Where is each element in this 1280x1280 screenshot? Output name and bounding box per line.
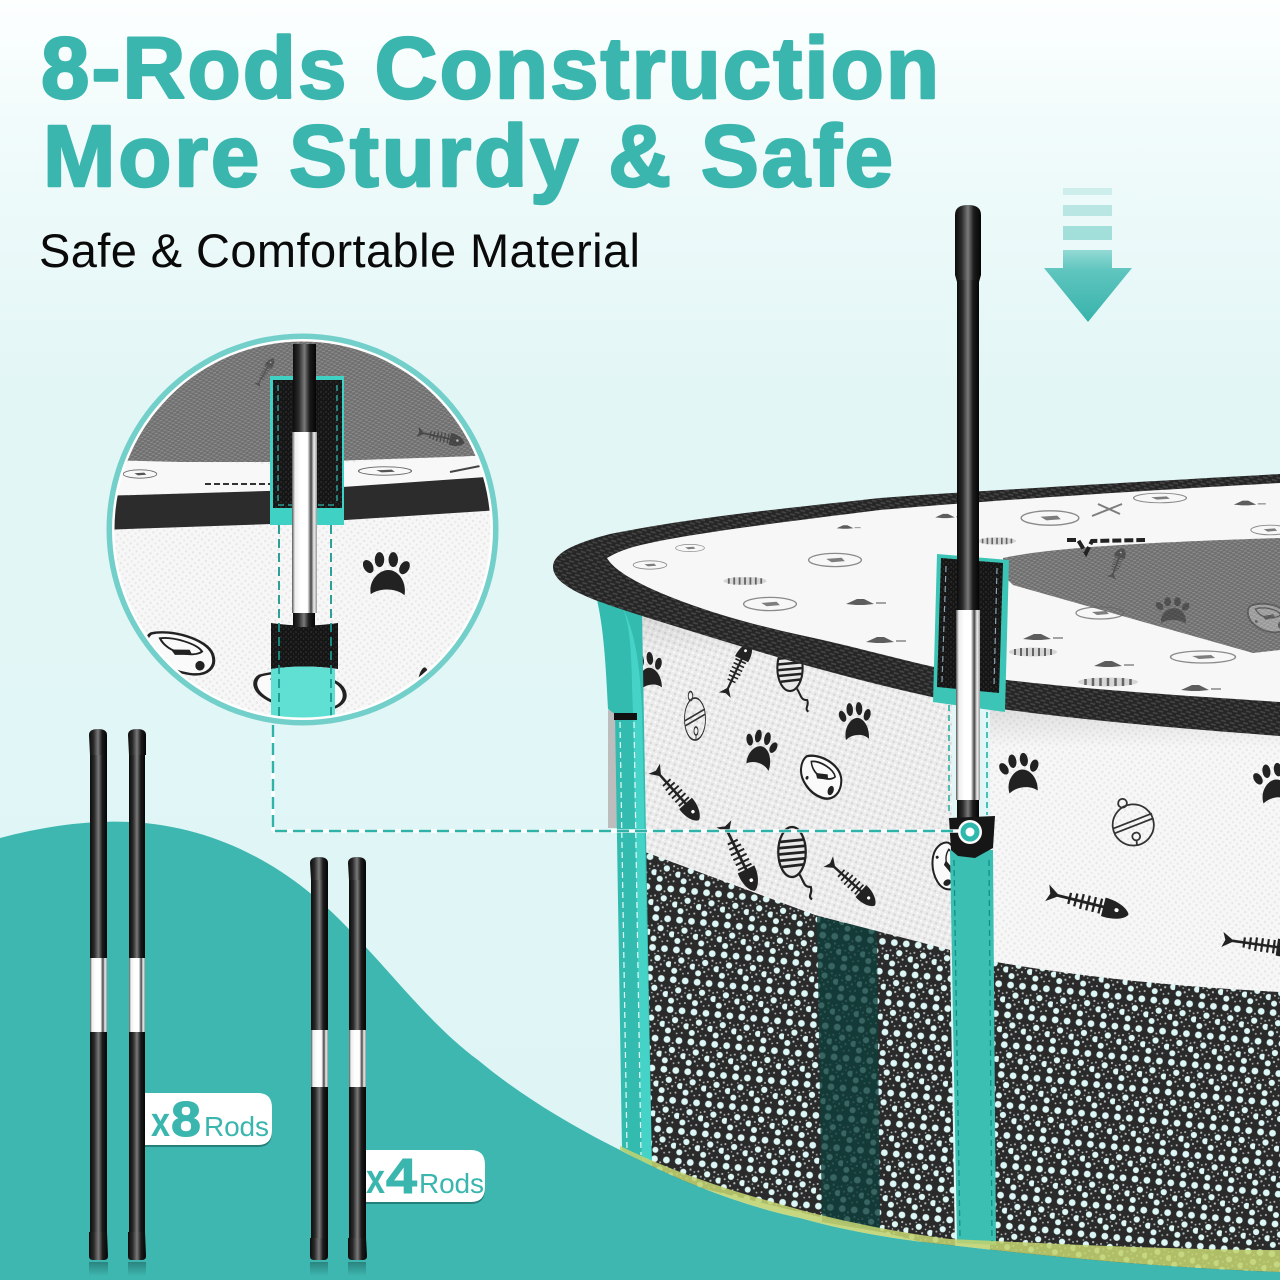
label: x4 rods: 4 — [386, 1150, 417, 1204]
icon: bell — [684, 692, 706, 740]
panel: left wall mesh — [645, 852, 955, 1250]
subtitle: Safe & Comfortable Material — [39, 224, 640, 277]
title: More Sturdy & Safe — [43, 108, 893, 205]
white band — [120, 456, 483, 494]
panel: center strap — [950, 850, 996, 1245]
label: x4 rods: x — [366, 1155, 386, 1202]
panel: left side strap — [597, 600, 652, 1170]
label: x8 rods: Rods — [204, 1111, 269, 1142]
icon: paw prints — [642, 652, 871, 771]
label: x8 rods: 8 — [171, 1093, 201, 1147]
icon: dark fish bone on rim edge — [1067, 540, 1145, 553]
panel: rim binding — [553, 474, 1280, 736]
title — [41, 20, 939, 205]
panel: gray mesh opening — [1003, 538, 1280, 653]
icon: bowls — [800, 754, 951, 890]
icon: yarn balls — [777, 645, 812, 900]
label: x4 rods — [366, 1150, 485, 1204]
rod detail — [292, 344, 317, 627]
panel: magnifier circle — [100, 330, 510, 730]
upper velcro tab — [270, 376, 344, 525]
long rod with velcro sleeve — [933, 205, 1009, 858]
connector node — [958, 820, 982, 844]
icon: flattened print marks — [633, 493, 1280, 691]
dashed stitching — [949, 705, 987, 815]
yellow glow edge — [620, 1146, 1280, 1272]
panel: left wall fabric — [642, 616, 952, 960]
dashed guide lines — [279, 525, 331, 720]
icon: lens bowl — [147, 631, 216, 676]
panel: top fabric surface — [607, 483, 1280, 702]
panel: right wall mesh — [990, 961, 1280, 1280]
rod 2 — [128, 729, 146, 1276]
rod 3 — [310, 857, 328, 1276]
icon: down arrow — [1044, 188, 1132, 322]
velcro sleeve — [933, 554, 1009, 712]
icon: lens bowl behind strap — [255, 672, 345, 710]
rod clip — [949, 816, 995, 858]
gray mesh zone — [127, 342, 476, 462]
title: 8-Rods Construction — [41, 20, 939, 117]
rods set of 4 — [310, 857, 367, 1276]
rods set of 8 — [89, 729, 146, 1276]
icon: fish bones — [648, 640, 881, 911]
rod 1 — [89, 729, 108, 1276]
icon: lens paw — [361, 552, 412, 595]
dashed connector line — [273, 725, 960, 831]
label: x8 rods — [145, 1093, 272, 1147]
icon: right wall bell — [1110, 796, 1156, 847]
rod shaft — [955, 205, 981, 830]
teal hill background — [0, 822, 1280, 1280]
icon: right wall fish bones — [1045, 884, 1280, 959]
rod 4 — [348, 857, 367, 1276]
label: x8 rods: x — [151, 1098, 171, 1145]
rim band — [100, 476, 500, 530]
panel: right wall fabric — [990, 700, 1280, 1000]
lower velcro tab — [271, 623, 338, 718]
label: x4 rods: Rods — [419, 1168, 484, 1199]
icon: right wall paw prints — [996, 751, 1280, 806]
pet playpen — [553, 474, 1280, 1280]
